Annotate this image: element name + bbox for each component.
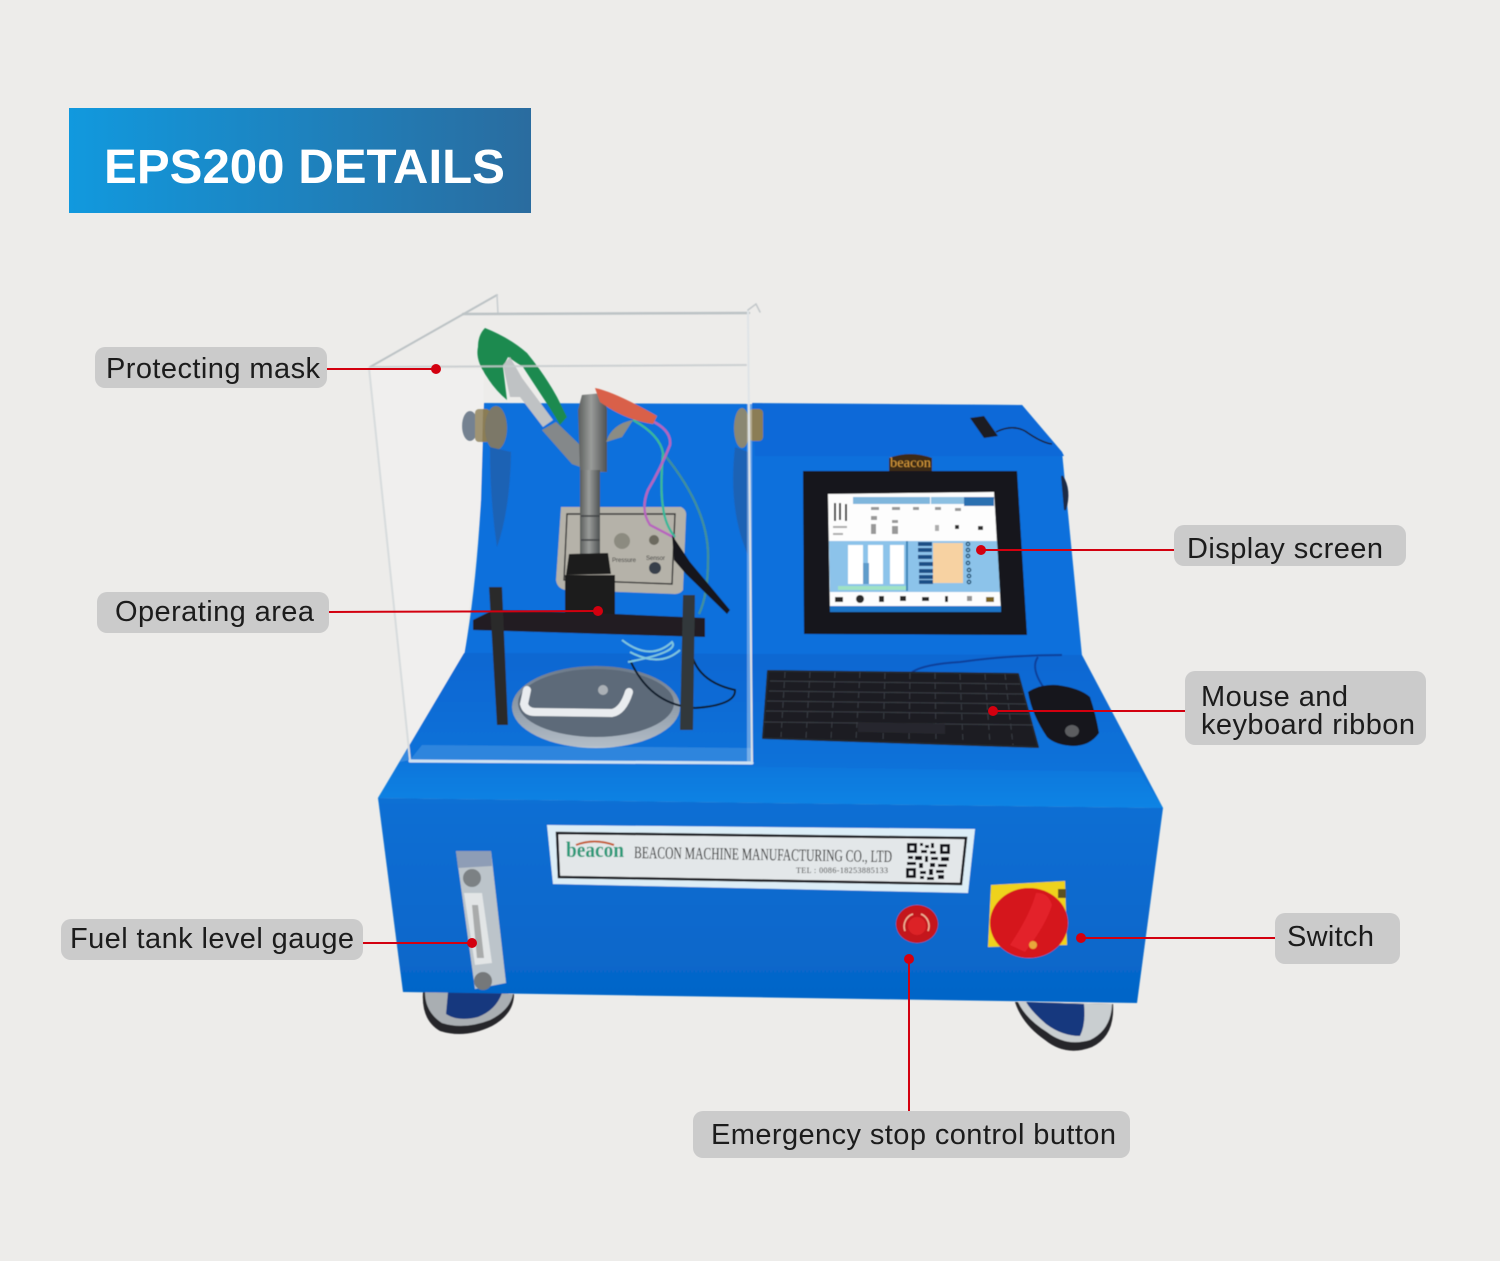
wires (633, 420, 708, 614)
upper console panel (464, 403, 1082, 656)
left foot (423, 992, 514, 1034)
callout: display screen: Display screen (1187, 533, 1383, 565)
callout: protecting mask: Protecting mask (106, 353, 320, 385)
screen lower blue panel (829, 541, 1000, 592)
screen table (933, 543, 963, 583)
work deck (378, 653, 1163, 808)
callout: switch (1076, 913, 1400, 964)
nameplate: beacon (566, 837, 624, 862)
screen header (853, 497, 930, 504)
beacon badge: beacon (890, 456, 931, 471)
nameplate: BEACON MACHINE MANUFACTURING CO., LTD (634, 843, 892, 866)
callout: switch: Switch (1287, 921, 1374, 953)
base front panel (378, 798, 1163, 1003)
callout: fuel tank level gauge: Fuel tank level gauge (70, 923, 354, 955)
nameplate: TEL : 0086-18253885133 (796, 866, 888, 875)
right foot (1015, 1002, 1113, 1051)
keyboard cable (912, 655, 1062, 688)
side knob left (462, 406, 511, 547)
callout: protecting mask (95, 347, 441, 388)
callout: mouse and keyboard ribbon: Mouse and (1201, 681, 1348, 713)
terminal plate: Sensor (646, 556, 665, 562)
fuel hoses (622, 640, 680, 662)
deck front band (378, 762, 1163, 808)
green shield (477, 328, 567, 425)
screen diagram area (833, 503, 983, 535)
side knob right (733, 408, 763, 555)
mouse (1028, 685, 1099, 746)
rear cable clip (970, 416, 1067, 510)
callout: emergency stop control button: Emergency stop control button (711, 1119, 1116, 1151)
terminal plate: Pressure (612, 558, 637, 564)
QR code (906, 843, 950, 880)
callout: operating area (97, 592, 603, 633)
title banner (69, 108, 531, 213)
callout: fuel tank level gauge (61, 919, 477, 960)
injector assembly (503, 357, 657, 558)
callout: emergency stop control button (693, 954, 1130, 1158)
terminal plate (556, 507, 686, 594)
sensor connector (672, 535, 730, 614)
callout: operating area: Operating area (115, 596, 315, 628)
keyboard (763, 671, 1038, 747)
callout: mouse and keyboard ribbon: keyboard ribbon (1201, 709, 1415, 741)
nameplate (547, 825, 975, 893)
jig clamp bar and posts (473, 553, 705, 730)
machine photo illustration (369, 295, 1163, 1051)
title banner: EPS200 DETAILS (104, 141, 505, 194)
screen toolbar (835, 595, 994, 603)
main switch (988, 881, 1068, 958)
callout: display screen (976, 525, 1406, 566)
callout: mouse and keyboard ribbon (988, 671, 1426, 745)
protecting mask acrylic cover (369, 295, 760, 763)
console top bevel (752, 403, 1064, 456)
screen taskbar (830, 606, 1001, 612)
emergency stop button (896, 905, 938, 943)
jig bottom disc (512, 640, 735, 748)
display screen (803, 471, 1027, 635)
fuel level gauge (456, 851, 506, 990)
